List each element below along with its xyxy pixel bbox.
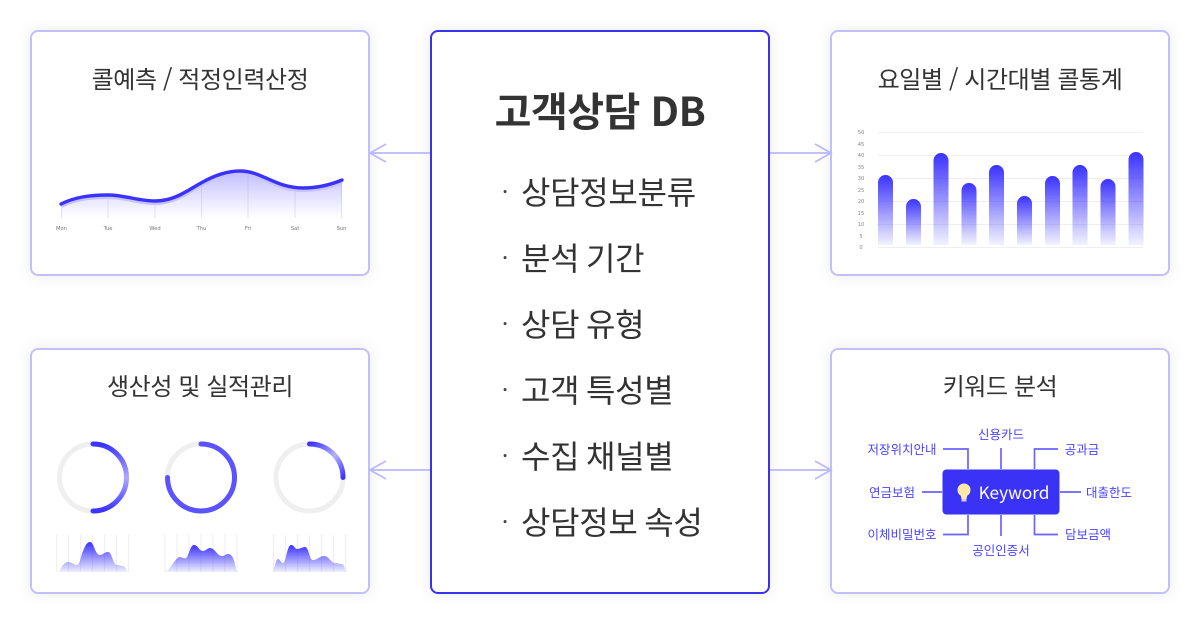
- arrow: to keyword panel: [770, 461, 831, 479]
- keyword diagram: [867, 424, 1132, 559]
- list of DB items: 분석 기간: [521, 234, 644, 280]
- list of DB items: ·: [502, 241, 508, 273]
- heading: productivity: 생산성 및 실적관리: [107, 367, 293, 402]
- bar chart: 30: [858, 176, 864, 182]
- list of DB items: ·: [502, 307, 508, 339]
- keyword labels: 저장위치안내: [867, 439, 937, 458]
- icon: light bulb: [958, 484, 970, 502]
- line chart: Wed: [149, 226, 161, 232]
- keyword diagram: Keyword: [979, 479, 1049, 504]
- mini area charts: [56, 535, 346, 572]
- heading: keyword analysis: 키워드 분석: [943, 367, 1057, 402]
- panel: call statistics: [831, 31, 1169, 275]
- arrow: to forecast panel: [370, 144, 430, 162]
- keyword labels: 공과금: [1065, 439, 1099, 458]
- line chart: Sat: [291, 226, 299, 232]
- bar chart: 40: [858, 153, 864, 159]
- list of DB items: 상담정보 속성: [521, 498, 703, 544]
- list of DB items: 상담정보분류: [521, 168, 696, 214]
- line chart: [56, 171, 346, 232]
- panel: forecast and staffing: [31, 31, 369, 275]
- list of DB items: 고객 특성별: [521, 366, 673, 412]
- line chart: Tue: [103, 226, 112, 232]
- heading: customer consultation DB: 고객상담 DB: [495, 80, 705, 138]
- panel: productivity: [31, 349, 369, 593]
- list of DB items: ·: [502, 505, 508, 537]
- list of DB items: ·: [502, 439, 508, 471]
- bar chart: [858, 130, 1144, 251]
- keyword labels: 대출한도: [1086, 482, 1132, 501]
- keyword labels: 이체비밀번호: [867, 524, 937, 543]
- arrow: to productivity panel: [370, 461, 430, 479]
- heading: call statistics: 요일별 / 시간대별 콜통계: [878, 60, 1122, 95]
- keyword box: [942, 470, 1060, 514]
- line chart: Sun: [337, 226, 346, 232]
- panel: customer consultation DB: [431, 31, 769, 593]
- bar chart: 45: [858, 142, 864, 148]
- keyword labels: [867, 424, 1132, 559]
- bar chart: 20: [858, 199, 864, 205]
- bar chart: 10: [858, 222, 864, 228]
- arrow: to call statistics panel: [770, 144, 831, 162]
- bar chart: 0: [859, 245, 863, 251]
- panel: keyword analysis: [831, 349, 1169, 593]
- keyword labels: 신용카드: [978, 424, 1024, 443]
- keyword labels: 연금보험: [869, 482, 915, 501]
- bar chart: 15: [858, 211, 864, 217]
- keyword labels: 공인인증서: [972, 540, 1030, 559]
- line chart: Thu: [196, 226, 206, 232]
- heading: forecast: 콜예측 / 적정인력산정: [92, 60, 308, 95]
- list of DB items: ·: [502, 175, 508, 207]
- keyword labels: 담보금액: [1065, 524, 1111, 543]
- donut charts: [60, 444, 343, 511]
- list of DB items: 수집 채널별: [521, 432, 673, 478]
- line chart: Fri: [245, 226, 251, 232]
- list of DB items: [502, 168, 703, 544]
- bar chart: 50: [858, 130, 864, 136]
- bar chart: 5: [859, 234, 863, 240]
- bar chart: 35: [858, 165, 864, 171]
- line chart: Mon: [56, 226, 67, 232]
- list of DB items: ·: [502, 373, 508, 405]
- list of DB items: 상담 유형: [521, 300, 644, 346]
- bar chart: 25: [858, 188, 864, 194]
